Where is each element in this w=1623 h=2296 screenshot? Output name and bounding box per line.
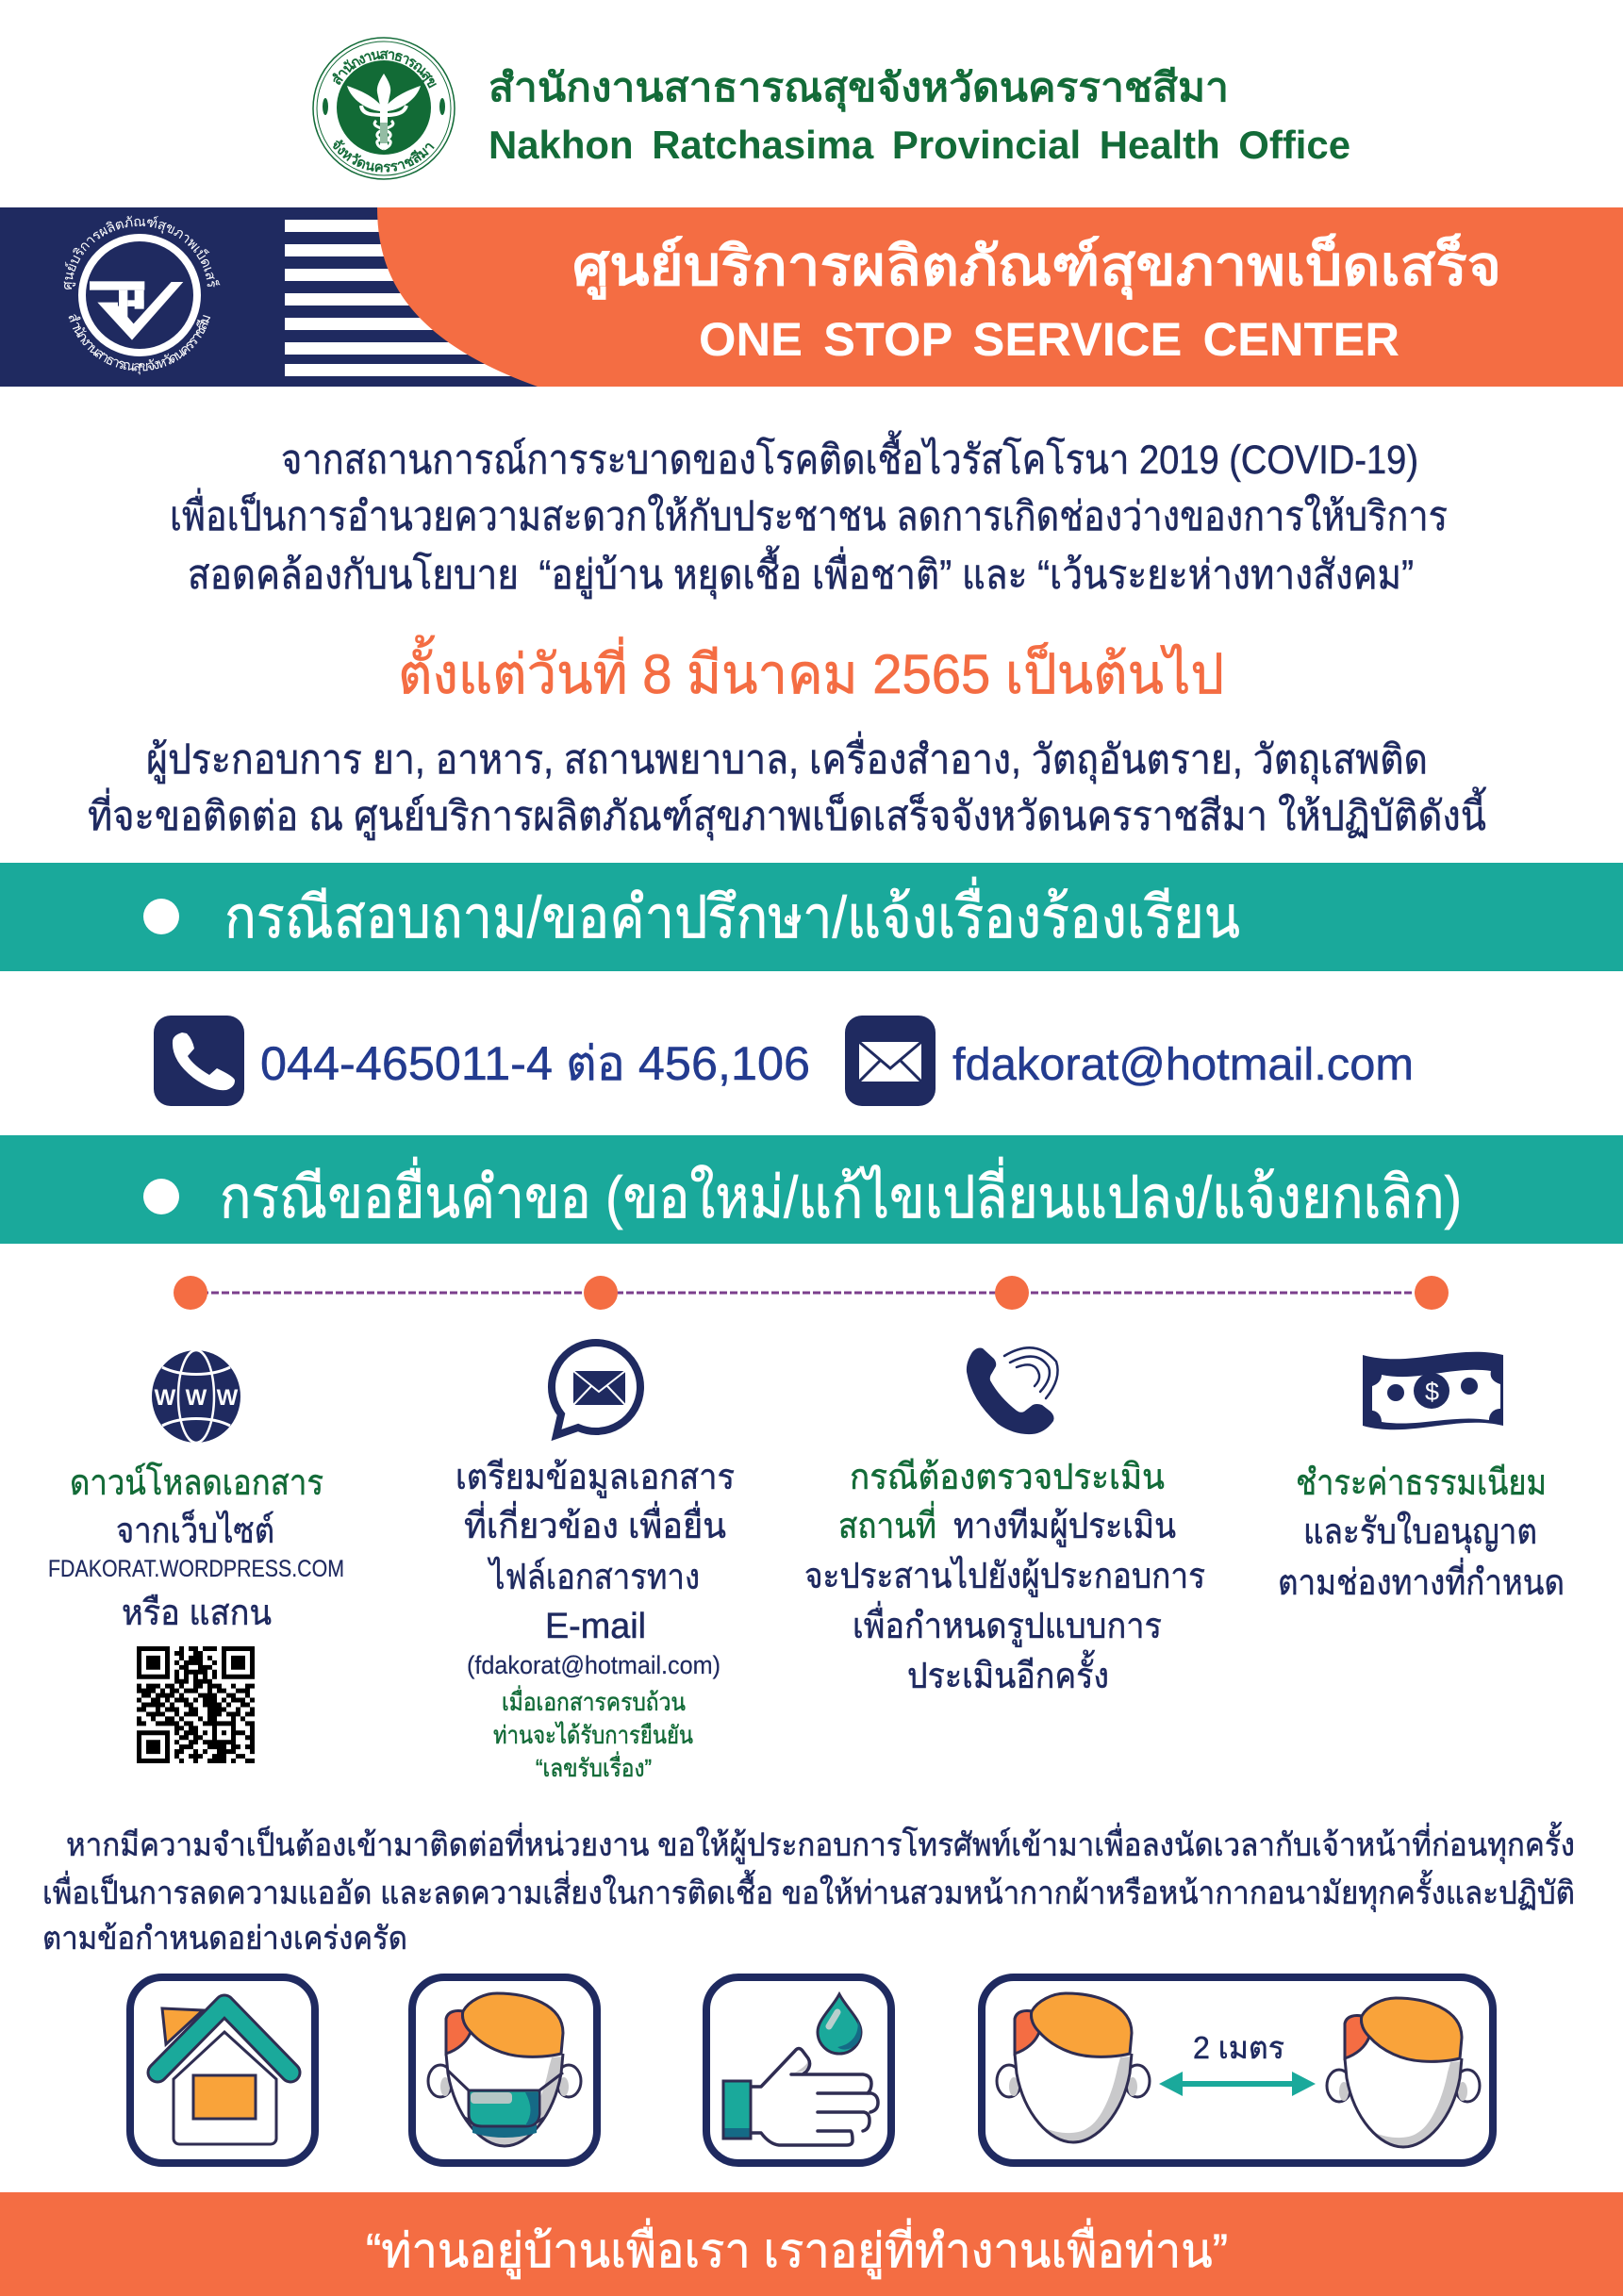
step 4: pay fees: ตามช่องทางที่กำหนด xyxy=(1278,1558,1565,1603)
step 4: pay fees xyxy=(1278,1352,1565,1603)
icon card: keep 2 metres distance xyxy=(982,1977,1493,2163)
contact: phone: 044-465011-4 ต่อ 456,106 xyxy=(260,1037,810,1090)
icon: banknote: $ xyxy=(1425,1378,1439,1406)
step 3: on-site assessment: ประเมินอีกครั้ง xyxy=(907,1649,1109,1696)
step 3: on-site assessment xyxy=(804,1347,1205,1696)
section band: inquiries xyxy=(0,863,1623,971)
icon: mail speech bubble xyxy=(552,1343,640,1435)
logo: provincial health office seal xyxy=(312,37,455,180)
intro paragraph: เพื่อเป็นการอำนวยความสะดวกให้กับประชาชน ลดการเกิดช่องว่างของการให้บริการ xyxy=(170,488,1448,539)
effective date: ตั้งแต่วันที่ 8 มีนาคม 2565 เป็นต้นไป xyxy=(398,636,1224,705)
section band: applications: กรณีขอยื่นคำขอ (ขอใหม่/แก้ไขเปลี่ยนแปลง/แจ้งยกเลิก) xyxy=(220,1157,1462,1231)
step 2: prepare documents by email: ที่เกี่ยวข้อง เพื่อยื่น xyxy=(464,1501,726,1546)
timeline: four steps xyxy=(174,1276,1449,1310)
footer slogan xyxy=(0,2192,1623,2296)
step 2: prepare documents by email: เมื่อเอกสารครบถ้วน xyxy=(502,1685,686,1716)
contact: email: fdakorat@hotmail.com xyxy=(952,1040,1414,1090)
icon: www globe: W xyxy=(155,1385,176,1411)
banner title in English: ONE STOP SERVICE CENTER xyxy=(699,313,1399,366)
QR code xyxy=(137,1646,255,1763)
icon card: stay at home xyxy=(130,1977,315,2163)
icon: www globe: W xyxy=(217,1385,239,1411)
step 1: download documents: FDAKORAT.WORDPRESS.COM xyxy=(48,1556,344,1582)
step 1: download documents xyxy=(48,1350,344,1763)
step 4: pay fees: ชำระค่าธรรมเนียม xyxy=(1296,1463,1547,1503)
icon: www globe: W xyxy=(186,1385,207,1411)
audience paragraph: ผู้ประกอบการ ยา, อาหาร, สถานพยาบาล, เครื่องสำอาง, วัตถุอันตราย, วัตถุเสพติด xyxy=(146,732,1428,785)
step 3: on-site assessment: สถานที่ xyxy=(838,1501,936,1546)
contact: email xyxy=(845,1016,1414,1106)
intro paragraph: สอดคล้องกับนโยบาย “อยู่บ้าน หยุดเชื้อ เพื่อชาติ” และ “เว้นระยะห่างทางสังคม” xyxy=(188,545,1414,600)
step 2: prepare documents by email: ท่านจะได้รับการยืนยัน xyxy=(493,1721,693,1749)
advisory paragraph: ตามข้อกำหนดอย่างเคร่งครัด xyxy=(42,1921,407,1957)
step 3: on-site assessment: ทางทีมผู้ประเมิน xyxy=(953,1507,1176,1547)
section band: applications xyxy=(0,1135,1623,1244)
icon: ringing phone xyxy=(967,1347,1058,1434)
step 2: prepare documents by email: E-mail xyxy=(545,1607,646,1646)
person left xyxy=(997,1993,1150,2142)
person right xyxy=(1327,1998,1480,2147)
step 2: prepare documents by email xyxy=(455,1343,735,1782)
step 3: on-site assessment: กรณีต้องตรวจประเมิน xyxy=(850,1458,1165,1497)
logo: provincial health office seal: จังหวัดนครราชสีมา xyxy=(333,140,435,173)
logo: one stop service emblem xyxy=(64,215,221,375)
office name in English: Nakhon Ratchasima Provincial Health Office xyxy=(489,123,1350,167)
icon card: wash hands xyxy=(706,1977,891,2163)
header: health office logo and name xyxy=(312,37,1350,180)
advisory paragraph xyxy=(42,1822,1575,1957)
step 2: prepare documents by email: (fdakorat@hotmail.com) xyxy=(467,1651,720,1679)
icon card: wear a mask xyxy=(412,1977,597,2163)
icon: phone xyxy=(154,1016,244,1106)
banner title in Thai: ศูนย์บริการผลิตภัณฑ์สุขภาพเบ็ดเสร็จ xyxy=(572,233,1501,301)
distance label: 2 เมตร xyxy=(1193,2030,1284,2065)
step 2: prepare documents by email: ไฟล์เอกสารทาง xyxy=(487,1557,700,1597)
arrow: two-way distance xyxy=(1159,2072,1316,2096)
step 4: pay fees: และรับใบอนุญาต xyxy=(1303,1511,1537,1553)
footer slogan: “ท่านอยู่บ้านเพื่อเรา เราอยู่ที่ทำงานเพื่อท่าน” xyxy=(366,2219,1228,2279)
audience paragraph: ที่จะขอติดต่อ ณ ศูนย์บริการผลิตภัณฑ์สุขภาพเบ็ดเสร็จจังหวัดนครราชสีมา ให้ปฏิบัติดังนี้ xyxy=(88,786,1486,841)
icon: envelope xyxy=(845,1016,936,1106)
step 3: on-site assessment: จะประสานไปยังผู้ประกอบการ xyxy=(804,1556,1205,1597)
icon: www globe xyxy=(152,1350,240,1443)
step 2: prepare documents by email: “เลขรับเรื่อง” xyxy=(536,1751,652,1782)
step 2: prepare documents by email: เตรียมข้อมูลเอกสาร xyxy=(455,1458,735,1498)
office name in Thai: สำนักงานสาธารณสุขจังหวัดนครราชสีมา xyxy=(489,65,1229,112)
step 1: download documents: หรือ แสกน xyxy=(122,1594,272,1633)
banner: one stop service center xyxy=(0,207,1623,387)
contact: phone xyxy=(154,1016,810,1106)
intro paragraph xyxy=(170,430,1448,600)
intro paragraph: จากสถานการณ์การระบาดของโรคติดเชื้อไวรัสโคโรนา 2019 (COVID-19) xyxy=(281,430,1418,483)
audience paragraph xyxy=(88,732,1486,841)
step 1: download documents: จากเว็บไซต์ xyxy=(116,1509,274,1551)
icon: banknote xyxy=(1363,1352,1503,1429)
section band: inquiries: กรณีสอบถาม/ขอคำปรึกษา/แจ้งเรื่องร้องเรียน xyxy=(224,877,1240,950)
step 1: download documents: ดาวน์โหลดเอกสาร xyxy=(70,1462,323,1503)
logo: provincial health office seal: สำนักงานสาธารณสุข xyxy=(332,50,437,89)
step 3: on-site assessment: เพื่อกำหนดรูปแบบการ xyxy=(853,1601,1162,1647)
